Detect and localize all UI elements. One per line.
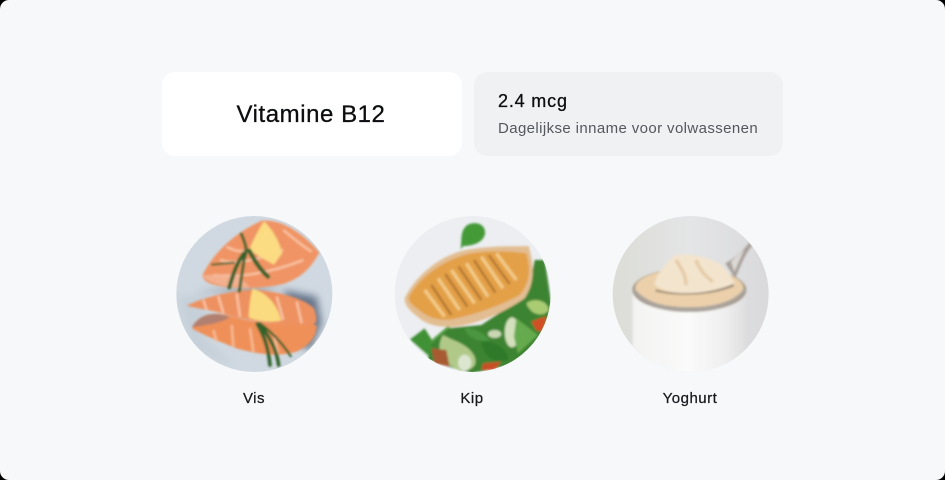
grilled chicken breast <box>405 246 533 327</box>
food photo: yoghurt <box>612 216 769 370</box>
cup body <box>633 293 745 377</box>
label: Kip: Kip <box>460 390 484 407</box>
leaf <box>461 223 485 249</box>
intake description: Dagelijkse inname voor volwassenen <box>498 120 758 137</box>
spoon handle <box>725 242 752 278</box>
salmon steak top <box>202 220 319 288</box>
intake amount: 2.4 mcg <box>498 91 568 111</box>
salmon steak bottom lower <box>192 314 317 355</box>
label: Yoghurt: Yoghurt <box>663 390 717 407</box>
rosemary sprigs <box>212 234 291 365</box>
salad <box>428 260 551 373</box>
food photo: chicken <box>395 216 551 372</box>
cup rim <box>632 268 746 312</box>
title: Vitamine B12: Vitamine B12 <box>237 101 385 128</box>
yoghurt on spoon <box>655 254 734 293</box>
label: Vis: Vis <box>243 390 265 407</box>
food photo: fish <box>176 216 332 372</box>
title card <box>162 72 462 156</box>
salmon steak bottom upper <box>187 289 316 326</box>
daily intake card <box>474 72 783 156</box>
food photo illustrations <box>176 216 769 372</box>
lemon slices <box>249 221 282 265</box>
